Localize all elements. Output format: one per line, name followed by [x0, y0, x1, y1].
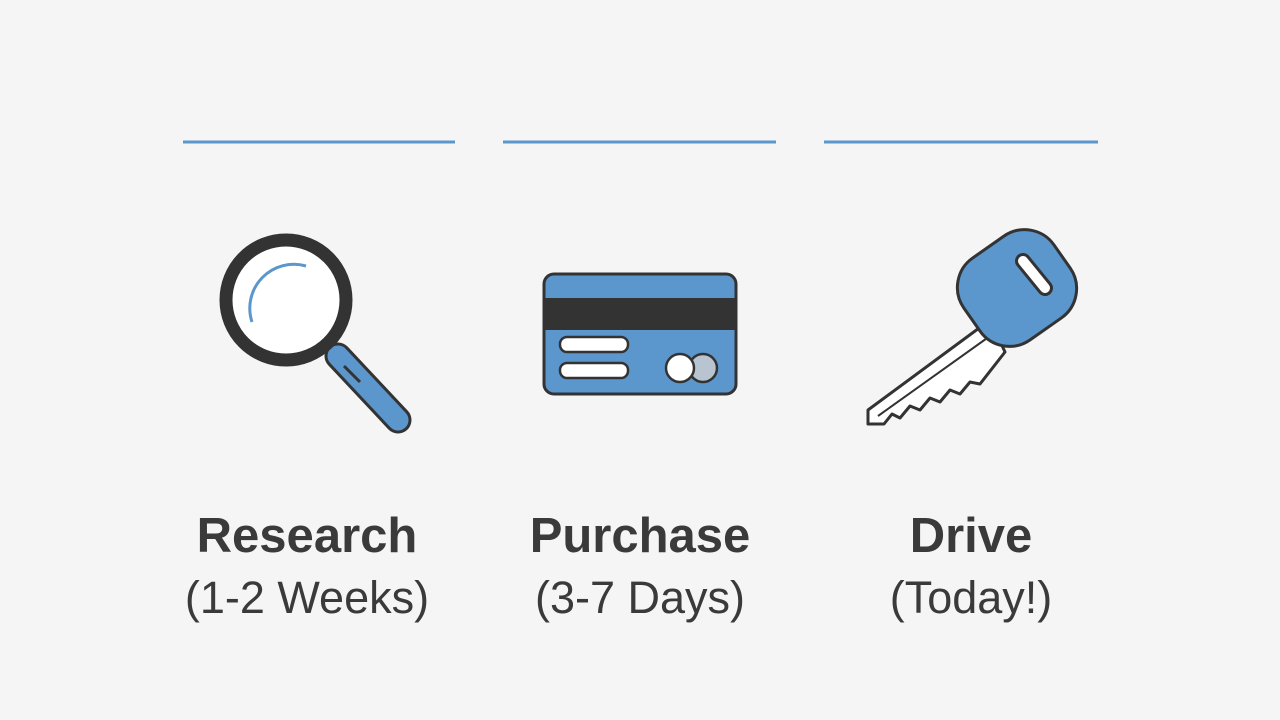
label: Purchase: Purchase [530, 509, 750, 563]
icon: credit card [544, 274, 736, 394]
label: Research: Research [197, 509, 417, 563]
label: Purchase [530, 509, 750, 623]
icon: key [868, 215, 1091, 424]
label: Research: (1-2 Weeks) [185, 572, 429, 623]
label: Drive: Drive [910, 509, 1032, 563]
label: Research [185, 509, 429, 623]
label: Purchase: (3-7 Days) [535, 572, 745, 623]
icon: magnifying glass [226, 240, 398, 420]
label: Drive: (Today!) [890, 572, 1052, 623]
label: Drive [890, 509, 1052, 623]
